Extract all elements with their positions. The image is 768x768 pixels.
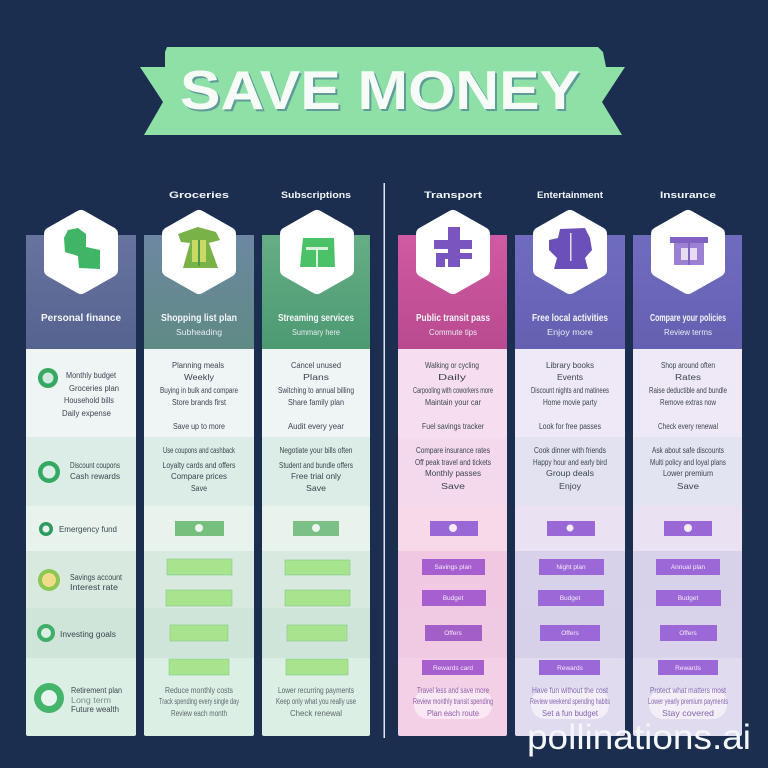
- row 1 text: Fuel savings tracker: [422, 422, 484, 431]
- row 5 bar: [287, 625, 347, 641]
- row 1 text: Buying in bulk and compare: [160, 386, 238, 395]
- title shadow: SAVE MONEY: [182, 61, 582, 123]
- header: [633, 235, 742, 349]
- row 3 button: [430, 521, 478, 536]
- title banner: [140, 47, 625, 135]
- row 2 text: Cash rewards: [70, 472, 120, 481]
- row 1 text: [649, 361, 727, 431]
- row 4 bars: Annual plan: [671, 564, 706, 571]
- row 6 text: Travel less and save more: [417, 686, 489, 695]
- row 2 text: Negotiate your bills often: [280, 446, 352, 455]
- row 1 text: Maintain your car: [425, 398, 481, 407]
- row 3 button: [293, 521, 339, 536]
- header sublabel: Subheading: [176, 328, 222, 337]
- row 6 bar: [169, 659, 229, 675]
- row 2 text: Enjoy: [559, 482, 581, 491]
- header label: Shopping list plan: [161, 313, 237, 324]
- row 1 text: Rates: [675, 373, 701, 382]
- header: [26, 235, 136, 349]
- row 4 bars: Savings plan: [434, 564, 472, 571]
- column label: Subscriptions: [281, 190, 351, 200]
- row 4 bars: Budget: [560, 595, 580, 602]
- row 6 text: Long term: [71, 696, 111, 705]
- row 1 text: Remove extras now: [660, 398, 716, 407]
- row 1 text: Carpooling with coworkers more: [413, 386, 493, 395]
- row 6 text: Future wealth: [71, 705, 119, 714]
- row 1 text: [413, 361, 493, 431]
- row 3 button: [664, 521, 712, 536]
- row 6 bar: [658, 660, 718, 675]
- row 2 text: Free trial only: [291, 472, 341, 481]
- hexagon badge: [169, 217, 229, 287]
- header label: Personal finance: [41, 313, 121, 324]
- column label: Transport: [424, 190, 482, 200]
- row 4 bars: [422, 559, 486, 606]
- row 6 icon: [34, 683, 64, 713]
- row 1 text: Raise deductible and bundle: [649, 386, 727, 395]
- row backgrounds: [398, 349, 507, 736]
- column 1: features: [26, 217, 136, 736]
- row 6 text: [413, 686, 493, 719]
- row backgrounds: [262, 349, 370, 736]
- row 1 text: [160, 361, 238, 431]
- row 2 text: Save: [677, 482, 700, 491]
- column 5: purple: [515, 190, 625, 736]
- column 4: pink: [398, 190, 507, 736]
- row 5 icon: [37, 624, 55, 642]
- row 2 text: Compare insurance rates: [416, 446, 490, 455]
- row 6 text: Retirement plan: [71, 686, 122, 695]
- row 2 text: Compare prices: [171, 472, 227, 481]
- icon: purple cross: [434, 227, 472, 267]
- row 6 text: [71, 686, 122, 714]
- column label: Entertainment: [537, 190, 603, 200]
- header sublabel: Commute tips: [429, 328, 477, 337]
- row 2 text: [70, 461, 120, 481]
- row 1 text: [62, 371, 119, 418]
- row 5 bar: [425, 625, 482, 641]
- row 1 text: Check every renewal: [658, 422, 718, 431]
- row 5 bar: [540, 625, 600, 641]
- row 6 text: Protect what matters most: [650, 686, 727, 695]
- row 2 text: Save: [306, 484, 327, 493]
- row 5 bar: [660, 625, 717, 641]
- row 2 text: Save: [441, 482, 466, 491]
- row 2 text: Lower premium: [663, 469, 713, 478]
- row 6 text: [159, 686, 239, 718]
- row 6 text: Check renewal: [290, 709, 342, 718]
- row 5 bar: Offers: [561, 630, 580, 637]
- row 2 text: Loyalty cards and offers: [162, 461, 236, 470]
- row 2 icon: [38, 461, 60, 483]
- row 4 text: Savings account: [70, 573, 123, 582]
- row 1 text: [531, 361, 609, 431]
- icon: purple square: [670, 237, 708, 265]
- row 6 bar: [539, 660, 600, 675]
- hexagon badge: [658, 217, 718, 287]
- row 1 text: Walking or cycling: [425, 361, 479, 370]
- column label: Groceries: [169, 190, 229, 200]
- row 3 button: [175, 521, 224, 536]
- row 6 text: Reduce monthly costs: [165, 686, 233, 695]
- row backgrounds: [144, 349, 254, 736]
- header: [262, 235, 370, 349]
- row 1 text: Planning meals: [172, 361, 224, 370]
- row 2 text: Ask about safe discounts: [652, 446, 724, 455]
- row 6 text: Review each month: [171, 709, 227, 718]
- row 6 bar: [286, 659, 348, 675]
- header label: Public transit pass: [416, 313, 490, 324]
- row 6 text: [276, 686, 356, 718]
- row 4 bars: Night plan: [556, 564, 586, 571]
- row 6 bar: Rewards card: [433, 665, 473, 672]
- header: [144, 235, 254, 349]
- column 3: green: [262, 190, 370, 736]
- row 1 text: Weekly: [184, 373, 214, 382]
- row 2 text: Save: [191, 484, 207, 493]
- row 1 text: Household bills: [64, 396, 114, 405]
- row 1 text: Discount nights and matinees: [531, 386, 609, 395]
- header: [515, 235, 625, 349]
- row 1 text: Plans: [303, 373, 329, 382]
- row 5 bar: Offers: [444, 630, 463, 637]
- icon: green square: [300, 238, 335, 267]
- hexagon badge: [51, 217, 111, 287]
- row 2 text: Happy hour and early bird: [533, 458, 607, 467]
- row 1 text: Daily expense: [62, 409, 112, 418]
- row 2 text: Monthly passes: [425, 469, 481, 478]
- row 6 text: Plan each route: [427, 709, 480, 718]
- row 5 bar: [170, 625, 228, 641]
- row 3 text: Emergency fund: [59, 525, 117, 534]
- header label: Compare your policies: [650, 313, 726, 324]
- watermark: pollinations.ai: [527, 718, 751, 757]
- row 1 text: Daily: [438, 373, 466, 382]
- row 1 text: Switching to annual billing: [278, 386, 354, 395]
- row 2 text: [279, 446, 353, 493]
- row backgrounds: [26, 349, 136, 736]
- header: [398, 235, 507, 349]
- header sublabel: Enjoy more: [547, 328, 594, 337]
- header sublabel: Review terms: [664, 328, 712, 337]
- row 1 text: Monthly budget: [66, 371, 117, 380]
- header label: Streaming services: [278, 313, 354, 324]
- row 6 text: [648, 686, 728, 719]
- column 2: green: [144, 190, 254, 736]
- hexagon badge: [423, 217, 483, 287]
- row 5 text: Investing goals: [60, 630, 116, 639]
- row 1 text: Shop around often: [661, 361, 715, 370]
- row 2 text: [533, 446, 607, 491]
- row 3 button: [547, 521, 595, 536]
- icon: purple bust: [549, 228, 592, 269]
- row 2 text: [415, 446, 491, 491]
- row 2 text: Off peak travel and tickets: [415, 458, 491, 467]
- row backgrounds: [515, 349, 625, 736]
- row 2 text: Student and bundle offers: [279, 461, 353, 470]
- row 3 icon: [39, 522, 53, 536]
- row 1 text: Library books: [546, 361, 594, 370]
- header label: Free local activities: [532, 313, 608, 324]
- row 6 text: Track spending every single day: [159, 697, 239, 706]
- row 6 text: Review monthly transit spending: [413, 697, 493, 706]
- row 6 bar: [422, 660, 484, 675]
- row 6 bar: Rewards: [557, 665, 584, 672]
- row 1 text: [278, 361, 354, 431]
- row 4 bars: [538, 559, 604, 606]
- row 1 icon: [38, 368, 58, 388]
- row 4 bars: [166, 559, 232, 606]
- row 2 text: Discount coupons: [70, 461, 120, 470]
- column 6: purple: [633, 190, 742, 736]
- row 1 text: Save up to more: [173, 422, 225, 431]
- row 1 text: Groceries plan: [69, 384, 119, 393]
- row 1 text: Audit every year: [288, 422, 344, 431]
- row 1 text: Events: [557, 373, 583, 382]
- row 4 bars: Budget: [443, 595, 463, 602]
- row 1 text: Share family plan: [288, 398, 344, 407]
- row 1 text: Home movie party: [543, 398, 597, 407]
- row 6 text: [530, 686, 610, 719]
- row 2 text: Group deals: [546, 469, 594, 478]
- row backgrounds: [633, 349, 742, 736]
- row 4 text: [70, 573, 123, 592]
- row 6 text: Review weekend spending habits: [530, 697, 610, 706]
- row 2 text: Use coupons and cashback: [163, 446, 236, 455]
- row 1 text: Store brands first: [172, 398, 227, 407]
- row 6 text: Lower recurring payments: [278, 686, 354, 695]
- row 2 text: Cook dinner with friends: [534, 446, 606, 455]
- row 6 bar: Rewards: [675, 665, 702, 672]
- row 6 text: Have fun without the cost: [532, 686, 609, 695]
- row 4 bars: [285, 560, 350, 606]
- row 5 bar: Offers: [679, 630, 698, 637]
- row 6 text: Set a fun budget: [542, 709, 599, 718]
- row 2 text: [162, 446, 236, 493]
- center divider: [384, 183, 385, 738]
- title: SAVE MONEY: [180, 59, 580, 121]
- row 4 bars: [656, 559, 721, 606]
- row 6 text: Keep only what you really use: [276, 697, 356, 706]
- row 2 text: [650, 446, 726, 491]
- row 6 text: Lower yearly premium payments: [648, 697, 728, 706]
- ribbon shape: [140, 47, 625, 135]
- column label: Insurance: [660, 190, 716, 200]
- header sublabel: Summary here: [292, 328, 340, 337]
- row 4 bars: Budget: [678, 595, 698, 602]
- row 2 text: Multi policy and loyal plans: [650, 458, 726, 467]
- row 1 text: Cancel unused: [291, 361, 341, 370]
- row 1 text: Look for free passes: [539, 422, 601, 431]
- row 4 icon: [38, 569, 60, 591]
- icon: green building: [178, 227, 220, 268]
- hexagon badge: [540, 217, 600, 287]
- hexagon badge: [287, 217, 347, 287]
- icon: green blocks: [64, 228, 100, 269]
- row 4 text: Interest rate: [70, 583, 119, 592]
- row 6 text: Stay covered: [662, 709, 714, 718]
